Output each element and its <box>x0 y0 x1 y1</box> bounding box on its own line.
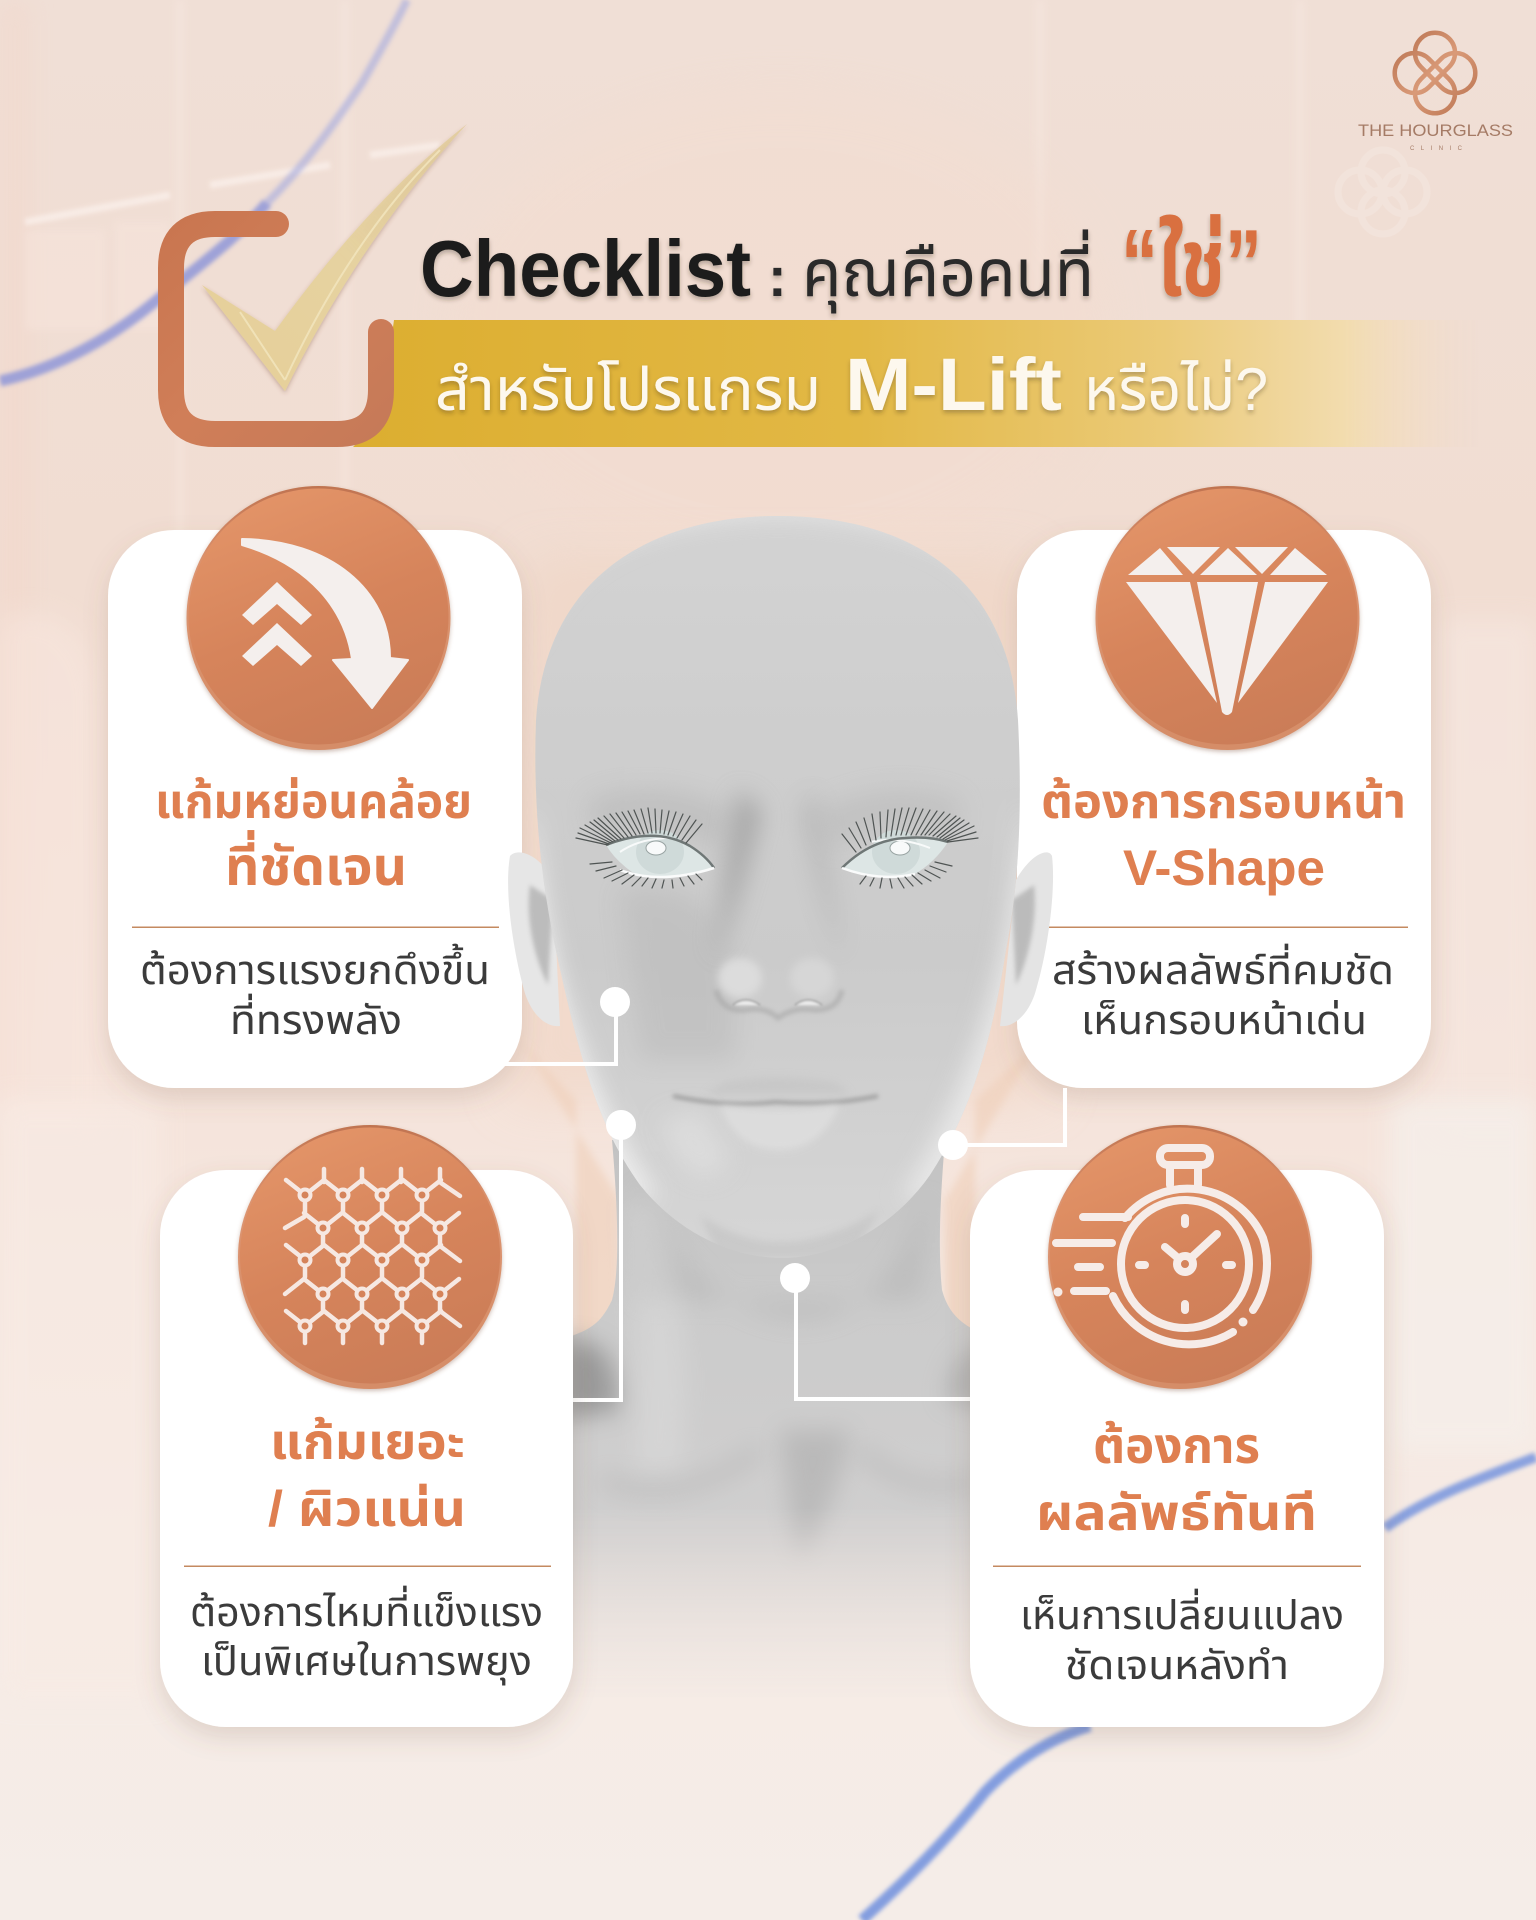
blue streak: top left <box>0 0 407 381</box>
divider <box>132 926 499 928</box>
logo wordmark: THE HOURGLASS <box>1358 121 1513 140</box>
heading: ที่ชัดเจน <box>225 830 407 897</box>
heading: แก้มหย่อนคล้อย <box>155 776 472 829</box>
title line 2 <box>435 343 1268 426</box>
description: เป็นพิเศษในการพยุง <box>201 1640 532 1685</box>
right eye <box>842 808 978 888</box>
left ear <box>508 852 560 1026</box>
divider <box>184 1566 551 1567</box>
panel: bottom left card <box>160 1125 573 1727</box>
icon: stopwatch <box>1048 1125 1312 1389</box>
title line 1: Checklist <box>420 224 751 313</box>
heading: ผลลัพธ์ทันที <box>1036 1485 1317 1541</box>
right ear <box>1000 852 1053 1026</box>
heading <box>1041 776 1406 896</box>
title line 1: : <box>768 245 787 308</box>
description <box>1052 943 1394 1043</box>
blue streak: right <box>1385 1457 1536 1528</box>
description <box>140 943 490 1043</box>
check mark icon <box>202 124 467 391</box>
heading <box>1036 1418 1317 1541</box>
face illustration <box>508 505 1053 1700</box>
heading: V-Shape <box>1123 840 1325 896</box>
face shading <box>520 505 1040 1258</box>
logo mark <box>1395 33 1475 113</box>
logo: The Hourglass Clinic <box>1338 33 1513 234</box>
divider <box>993 1566 1361 1567</box>
heading <box>268 1414 466 1537</box>
title line 2: หรือไม่? <box>1084 356 1268 423</box>
heading <box>155 776 472 897</box>
icon: thread lattice <box>238 1125 502 1389</box>
card background <box>1017 530 1431 1088</box>
description: ชัดเจนหลังทำ <box>1065 1644 1289 1688</box>
blue streak: bottom <box>862 1726 1090 1920</box>
logo ghost watermark <box>1338 150 1427 234</box>
connector: bottom left <box>570 1110 636 1400</box>
checkbox icon <box>171 224 381 434</box>
title line 1: “ใช่” <box>1121 210 1262 317</box>
description: สร้างผลลัพธ์ที่คมชัด <box>1052 943 1394 993</box>
mouth <box>673 1077 878 1150</box>
connector: top right <box>938 1088 1065 1160</box>
description <box>190 1585 543 1685</box>
heading: / ผิวแน่น <box>268 1481 466 1537</box>
description: ที่ทรงพลัง <box>230 993 402 1043</box>
card background <box>160 1170 573 1727</box>
heading: ต้องการกรอบหน้า <box>1041 776 1406 829</box>
title line 1: คุณคือคนที่ <box>802 229 1094 313</box>
nose <box>716 958 842 1018</box>
heading: ต้องการ <box>1093 1418 1260 1474</box>
title line 1 <box>420 210 1262 317</box>
title banner <box>353 320 1480 447</box>
title line 2: สำหรับโปรแกรม <box>435 356 821 423</box>
description: เห็นการเปลี่ยนแปลง <box>1020 1588 1344 1638</box>
divider <box>1047 926 1408 928</box>
head <box>535 516 1020 1258</box>
logo subtitle: CLINIC <box>1410 146 1463 152</box>
left eye <box>576 808 714 888</box>
card background <box>108 530 522 1088</box>
panel: bottom right card <box>970 1125 1384 1727</box>
description <box>1020 1588 1344 1688</box>
description: เห็นกรอบหน้าเด่น <box>1081 999 1367 1043</box>
icon: lifting arrow <box>186 486 450 750</box>
panel: top right card <box>1017 486 1431 1088</box>
description: ต้องการไหมที่แข็งแรง <box>190 1585 543 1635</box>
panel: top left card <box>108 486 522 1088</box>
heading: แก้มเยอะ <box>270 1414 465 1470</box>
icon: diamond <box>1096 486 1360 750</box>
connector: top left <box>505 987 630 1064</box>
neck <box>573 1140 970 1642</box>
connector: bottom right <box>780 1263 972 1399</box>
card background <box>970 1170 1384 1727</box>
title line 2: M-Lift <box>845 343 1062 426</box>
description: ต้องการแรงยกดึงขึ้น <box>140 943 490 993</box>
